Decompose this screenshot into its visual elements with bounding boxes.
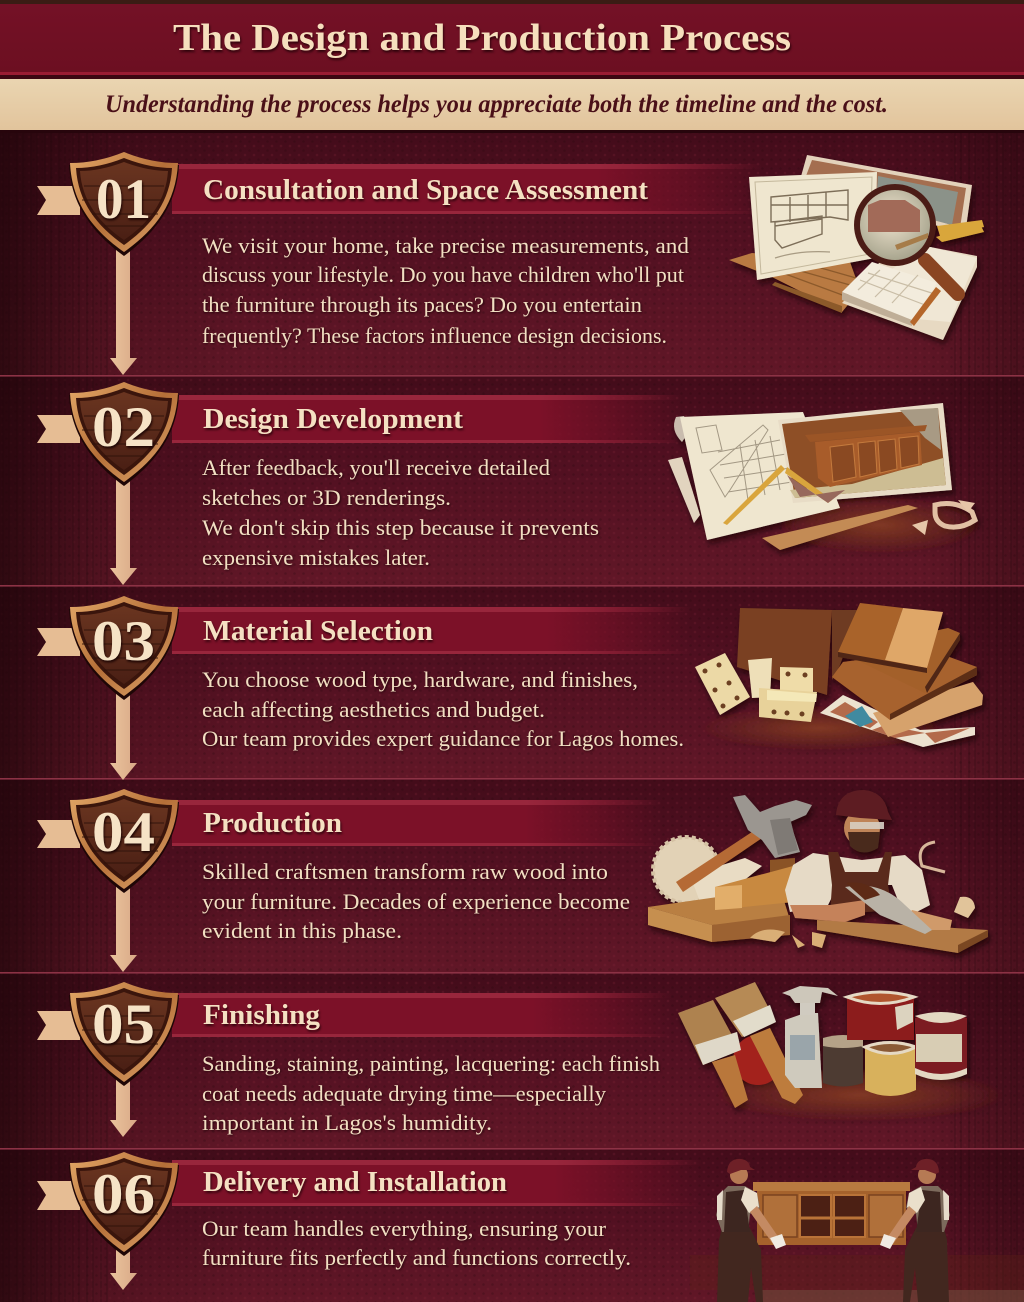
arrow 5 [110,1077,137,1137]
title text: The Design and Production Process [173,17,791,59]
heading band 4 [172,800,662,846]
body text 1: the furniture through its paces? Do you entertain [202,292,642,317]
ribbon 4 [37,820,80,848]
badge 01 [69,152,179,256]
badge 05 [69,982,179,1086]
heading band 5 [172,993,672,1037]
subtitle text: Understanding the process helps you appreciate both the timeline and the cost. [105,91,888,118]
badge 04 [69,789,179,893]
body text 2: sketches or 3D renderings. [202,485,451,510]
step 6 panel [37,1152,950,1302]
body text 4: Skilled craftsmen transform raw wood into [202,859,608,884]
ribbon 3 [37,628,80,656]
ribbon 1 [37,186,80,215]
body text 5: important in Lagos's humidity. [202,1110,492,1135]
badge 02: 02 [92,396,155,459]
body text 1: We visit your home, take precise measurements, and [202,233,689,258]
badge 01: 01 [96,168,151,231]
heading 2: Design Development [203,404,464,435]
arrow 1 [110,250,137,375]
illustration: blueprints and magnifier [729,155,984,340]
body text 5: coat needs adequate drying time—especially [202,1081,606,1106]
heading 3: Material Selection [203,616,433,647]
badge 06: 06 [92,1163,155,1226]
arrow 3 [110,693,137,780]
body text 4: your furniture. Decades of experience become [202,889,630,914]
body text 2: After feedback, you'll receive detailed [202,455,550,480]
body text 1 [202,233,689,348]
body text 1: frequently? These factors influence design decisions. [202,323,667,348]
heading 1: Consultation and Space Assessment [203,175,649,206]
heading 4: Production [203,808,342,839]
arrow 2 [110,480,137,585]
badge 03: 03 [92,610,155,673]
subtitle banner [0,79,1024,133]
body text 3 [202,667,684,751]
step 5 panel [37,982,1005,1137]
heading band 2 [172,395,682,443]
heading 6: Delivery and Installation [203,1167,507,1198]
badge 06 [69,1152,179,1256]
title banner [0,0,1024,79]
body text 5 [202,1051,660,1135]
body text 4: evident in this phase. [202,918,402,943]
body text 1: discuss your lifestyle. Do you have children who'll put [202,262,684,287]
badge 05: 05 [92,993,155,1056]
body text 3: You choose wood type, hardware, and finishes, [202,667,638,692]
step 3 panel [37,596,983,780]
step 4 panel [37,789,988,972]
ribbon 2 [37,415,80,443]
body text 5: Sanding, staining, painting, lacquering: each finish [202,1051,660,1076]
heading band 1 [172,164,762,214]
illustration: two installers carrying a cabinet [716,1159,950,1302]
badge 04: 04 [92,801,155,864]
ribbon 6 [37,1181,80,1210]
badge 03 [69,596,179,700]
body text 2: expensive mistakes later. [202,545,430,570]
arrow 6 [110,1247,137,1290]
body text 3: Our team provides expert guidance for Lagos homes. [202,726,684,751]
body text 4 [202,859,630,943]
illustration: sketches and cabinet rendering [668,403,980,553]
illustration: brushes and paint cans [678,982,1005,1121]
arrow 4 [110,886,137,972]
step 1 panel [37,152,984,375]
body text 6: Our team handles everything, ensuring your [202,1216,607,1241]
heading band 6 [172,1160,702,1206]
illustration: wood samples and hinges [695,603,983,750]
body text 6 [202,1216,631,1270]
badge 02 [69,382,179,486]
body text 2 [202,455,599,570]
heading band 3 [172,607,692,654]
heading 5: Finishing [203,1000,320,1031]
step 2 panel [37,382,980,585]
body text 2: We don't skip this step because it prevents [202,515,599,540]
illustration: craftsman at work [648,790,988,953]
body text 6: furniture fits perfectly and functions correctly. [202,1245,631,1270]
body text 3: each affecting aesthetics and budget. [202,697,545,722]
ribbon 5 [37,1011,80,1040]
